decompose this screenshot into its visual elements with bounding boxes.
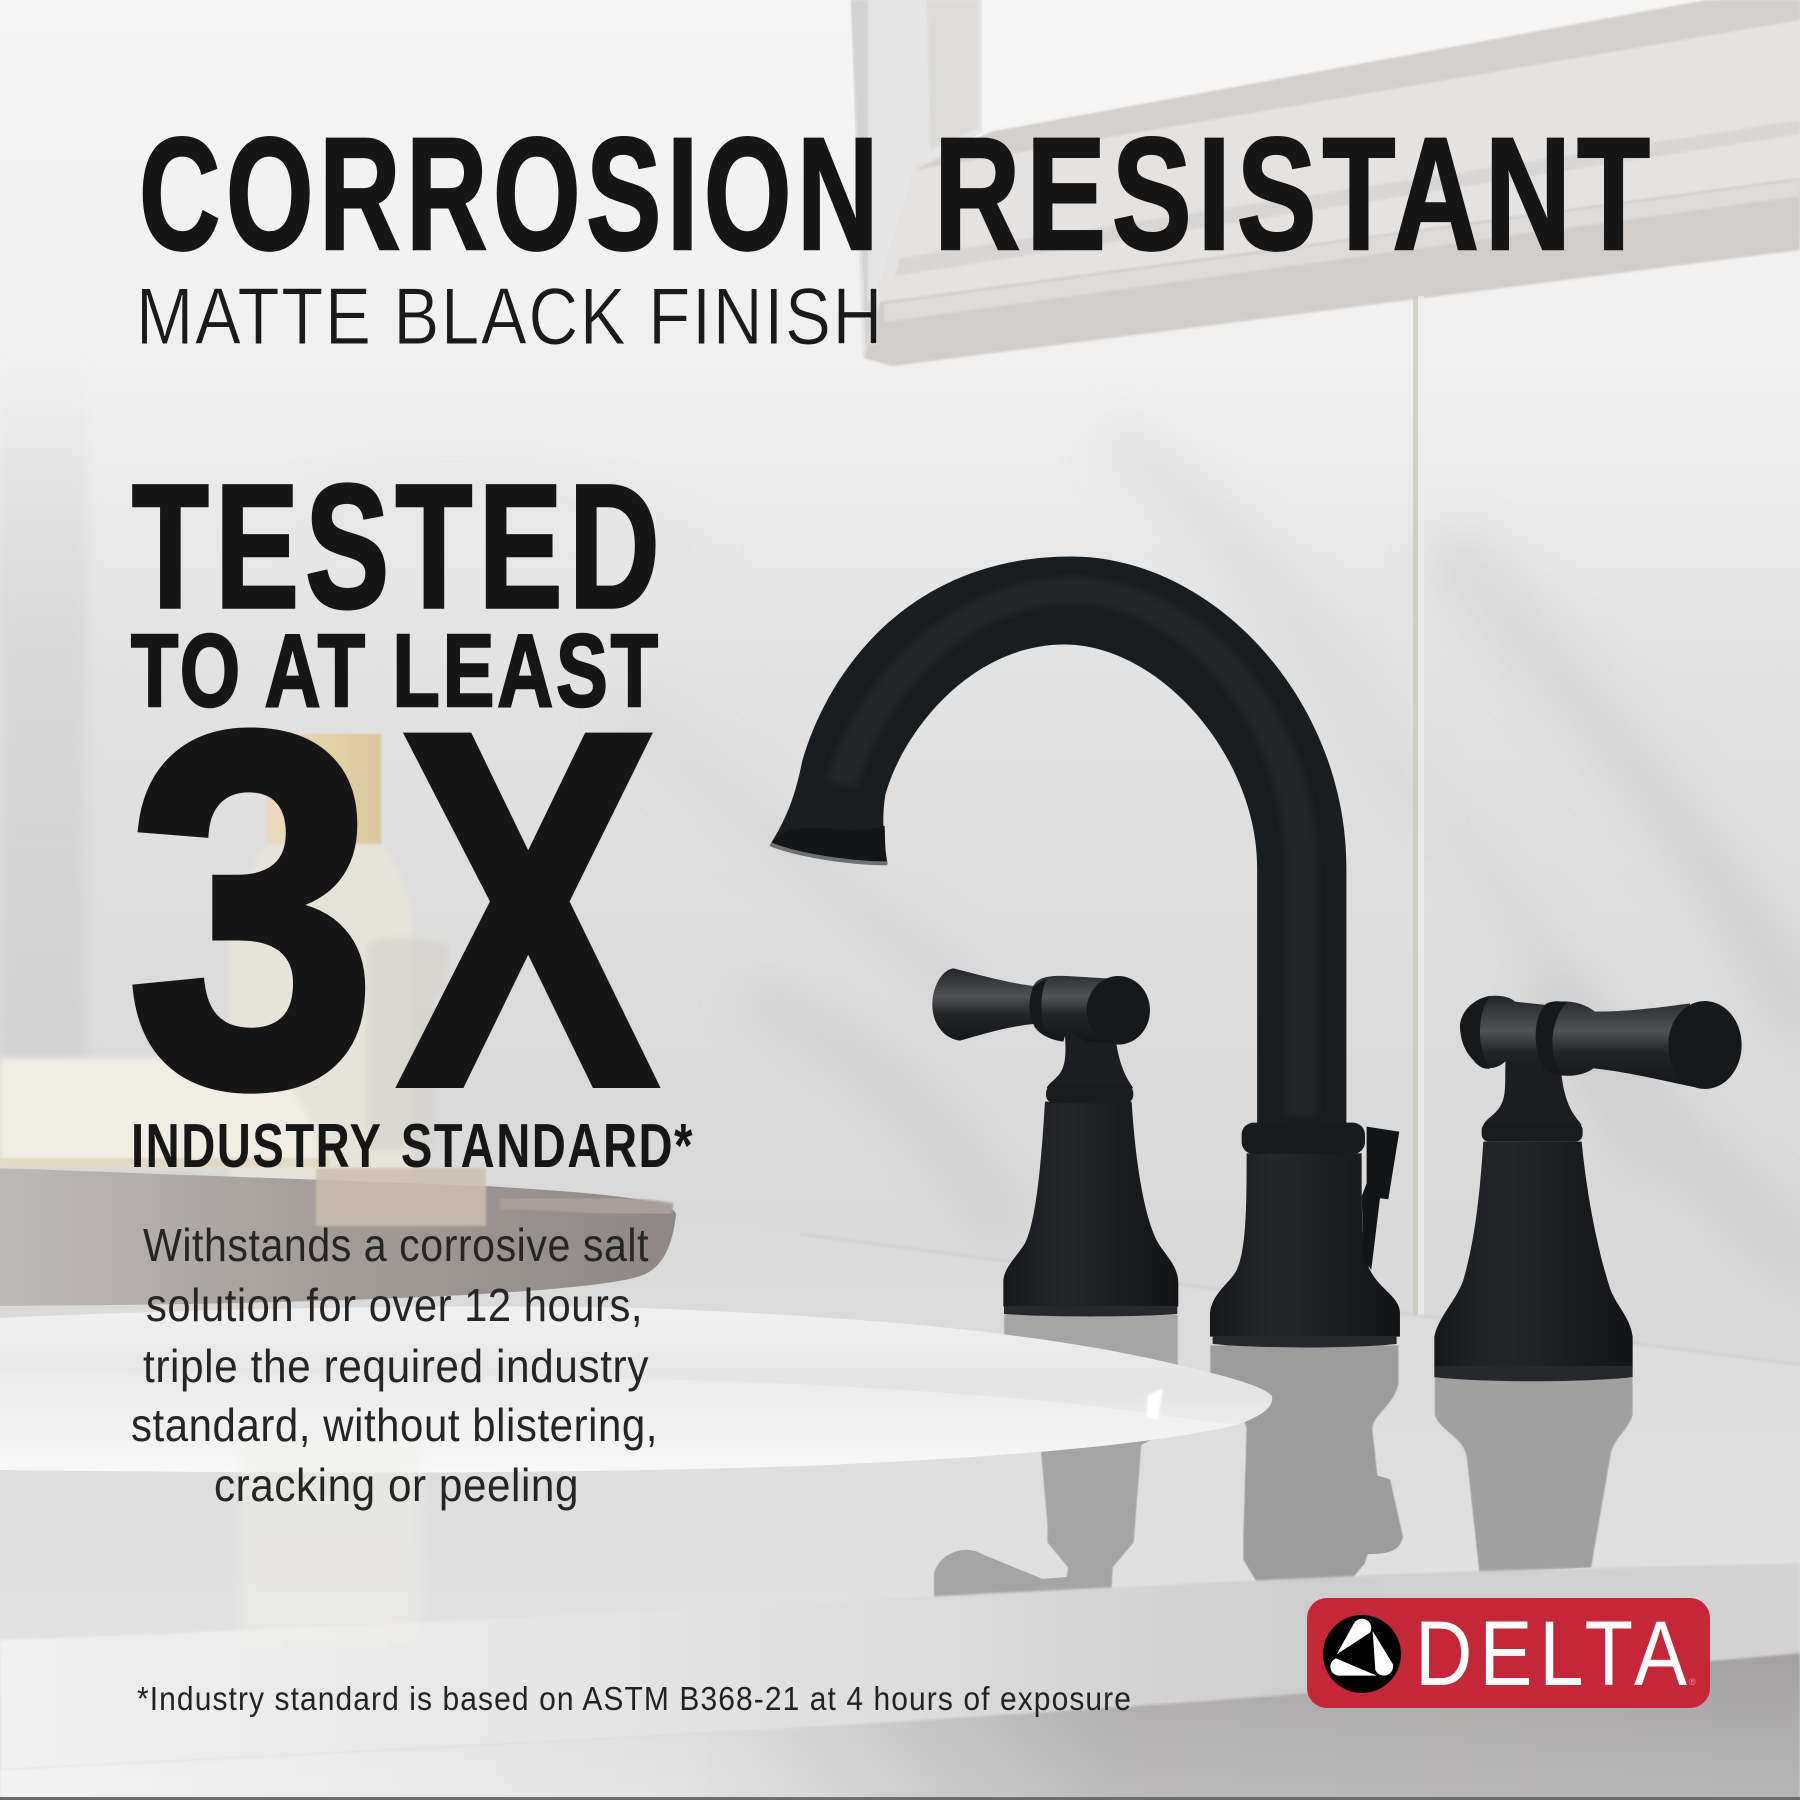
left lever ring — [1030, 978, 1047, 1033]
registered mark: ® — [1689, 1677, 1696, 1687]
faucet reflections — [934, 1315, 1633, 1606]
icon: Delta triangle mark — [1323, 1615, 1401, 1693]
countertop — [0, 1150, 1800, 1660]
dish highlight — [500, 1200, 672, 1212]
description: standard, without blistering, — [131, 1399, 658, 1451]
bottle — [230, 843, 413, 1200]
glass jar — [367, 938, 450, 1150]
reflection: spout base — [1210, 1345, 1403, 1587]
left bell — [1003, 1102, 1178, 1307]
left lever cap — [1087, 976, 1150, 1045]
INDUSTRY STANDARD: INDUSTRY STANDARD* — [131, 1112, 694, 1181]
left objects: bottles, soap and dish — [0, 734, 676, 1306]
sink — [0, 1306, 1272, 1472]
center collar — [1242, 1123, 1365, 1154]
candle — [316, 1168, 486, 1226]
right lever — [1460, 996, 1700, 1088]
marble veining — [300, 440, 1800, 1260]
claim block — [127, 449, 694, 1190]
counter front edge — [0, 1563, 1800, 1770]
subtitle: MATTE BLACK FINISH — [136, 272, 884, 362]
soap shadow line — [0, 1158, 330, 1168]
center ring — [1213, 1336, 1397, 1347]
reflection of bottle in counter — [240, 1440, 420, 1640]
counter back edge — [800, 1234, 1800, 1365]
description: Withstands a corrosive salt — [143, 1219, 649, 1271]
description: cracking or peeling — [214, 1459, 579, 1511]
right collar — [1482, 1123, 1583, 1142]
left base ring — [1004, 1306, 1177, 1316]
right bell — [1434, 1142, 1633, 1367]
right neck — [1483, 1047, 1582, 1125]
right lever flange — [1460, 996, 1490, 1069]
faucet — [770, 556, 1742, 1381]
reflection: left handle — [934, 1315, 1178, 1606]
center base — [1210, 1153, 1400, 1337]
left lever — [932, 968, 1117, 1043]
3X — [127, 630, 659, 1190]
gold cap — [266, 734, 381, 844]
sink bowl — [0, 1372, 1240, 1472]
soap — [0, 1058, 320, 1165]
spout — [770, 556, 1346, 1129]
3X: X — [399, 630, 659, 1190]
right lever cap — [1668, 1001, 1742, 1089]
dish — [0, 1168, 676, 1306]
right handle — [1434, 996, 1742, 1381]
tile joint — [1413, 296, 1424, 1574]
left collar — [1046, 1085, 1133, 1103]
description: triple the required industry — [143, 1340, 649, 1392]
left neck — [1047, 1017, 1133, 1088]
description — [131, 1219, 658, 1511]
wordmark: DELTA — [1415, 1603, 1694, 1705]
left handle and center base — [932, 968, 1400, 1347]
description: solution for over 12 hours, — [146, 1279, 643, 1331]
footnote: *Industry standard is based on ASTM B368-21 at 4 hours of exposure — [137, 1680, 1132, 1717]
cabinet below counter — [0, 1653, 1800, 1800]
TO AT LEAST: TO AT LEAST — [131, 613, 661, 728]
left door frame — [0, 360, 86, 1080]
mirror frame — [851, 0, 1800, 366]
right base ring — [1434, 1366, 1633, 1381]
3X: 3 — [127, 630, 377, 1190]
TESTED: TESTED — [132, 449, 666, 645]
title — [139, 104, 1656, 283]
frame vertical side — [851, 0, 982, 358]
reflection: right handle — [1435, 1378, 1633, 1573]
title: CORROSION — [139, 104, 884, 283]
drain lever — [1362, 1127, 1399, 1270]
frame bottom band — [864, 0, 1800, 365]
mirror glass — [982, 0, 1720, 130]
aerator tip — [770, 826, 887, 863]
Delta logo — [1307, 1598, 1710, 1708]
right lever ring — [1536, 1001, 1567, 1074]
sink highlight — [1146, 1388, 1163, 1420]
